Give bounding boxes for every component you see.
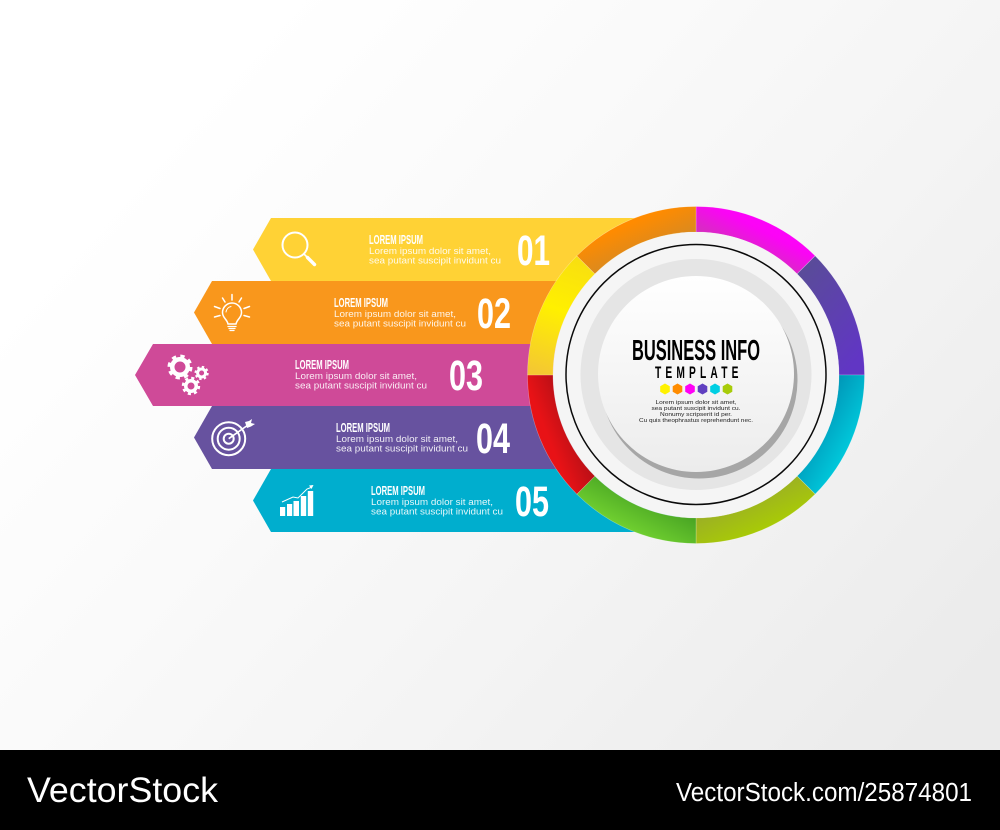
panel: ribbon 01	[253, 218, 680, 281]
text 05	[371, 497, 503, 516]
centre body text	[639, 400, 753, 424]
segment: cyan	[797, 375, 864, 494]
title: BUSINESS INFO	[632, 335, 760, 367]
text 01: Lorem ipsum dolor sit amet,	[369, 246, 491, 256]
icon: light bulb	[214, 294, 250, 330]
number 05: 05	[515, 478, 549, 526]
heading 03: LOREM IPSUM	[295, 357, 349, 372]
colour hexagon row	[660, 384, 732, 394]
number 01: 01	[517, 227, 550, 275]
segment: orange	[577, 206, 696, 274]
text 01	[369, 246, 501, 266]
panel: ribbon 02	[194, 281, 680, 344]
text 03	[295, 371, 427, 390]
footer url: VectorStock.com/25874801	[676, 779, 972, 807]
chart: segmented colour ring	[528, 206, 864, 544]
number 04: 04	[476, 415, 510, 463]
icon: target	[212, 419, 255, 455]
heading 01: LOREM IPSUM	[369, 232, 423, 247]
icon: gears	[169, 356, 208, 394]
text 04: sea putant suscipit invidunt cu	[336, 444, 468, 454]
text 05: sea putant suscipit invidunt cu	[371, 506, 503, 516]
segment: green	[577, 476, 696, 544]
panel: ribbon 05	[253, 469, 680, 532]
text 04	[336, 434, 468, 454]
subtitle: TEMPLATE	[655, 364, 743, 382]
segment: yellow	[528, 256, 595, 375]
panel: ribbon 04	[194, 406, 680, 469]
icon: magnifying glass	[282, 232, 314, 264]
text 05: Lorem ipsum dolor sit amet,	[371, 497, 493, 507]
footer bar	[0, 750, 1000, 830]
text 02	[334, 309, 466, 328]
text 03: Lorem ipsum dolor sit amet,	[295, 371, 417, 381]
heading 05: LOREM IPSUM	[371, 483, 425, 498]
heading 04: LOREM IPSUM	[336, 420, 390, 435]
number 03: 03	[449, 352, 483, 400]
text 04: Lorem ipsum dolor sit amet,	[336, 434, 458, 444]
footer brand: VectorStock	[27, 770, 218, 810]
panel: ribbon 03	[135, 344, 680, 406]
icon: growth chart	[280, 485, 314, 516]
centre body text: sea putant suscipit invidunt cu.	[652, 406, 741, 412]
centre body text: Cu quis theophrastus reprehendunt nec.	[639, 418, 753, 424]
centre body text: Lorem ipsum dolor sit amet,	[656, 400, 737, 406]
segment: purple	[797, 256, 864, 375]
segment: magenta	[696, 206, 815, 274]
text 01: sea putant suscipit invidunt cu	[369, 256, 501, 266]
text 03: sea putant suscipit invidunt cu	[295, 380, 427, 390]
text 02: Lorem ipsum dolor sit amet,	[334, 309, 456, 319]
segment: red	[528, 375, 595, 494]
number 02: 02	[477, 290, 511, 338]
segment: lime	[696, 476, 815, 544]
heading 02: LOREM IPSUM	[334, 295, 388, 310]
centre body text: Nonumy scripserit id per.	[660, 412, 732, 418]
central disc	[553, 232, 839, 518]
text 02: sea putant suscipit invidunt cu	[334, 318, 466, 328]
